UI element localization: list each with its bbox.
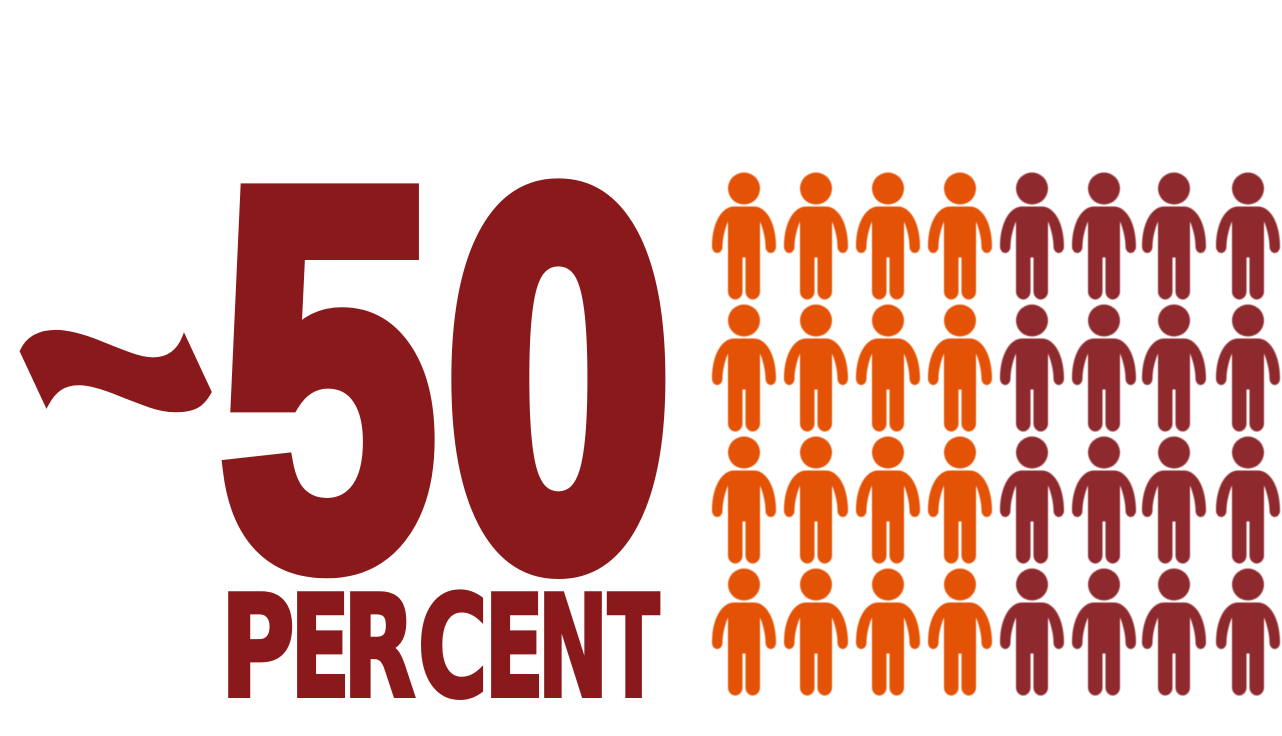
label: PERCENT: E <box>484 565 544 730</box>
label: PERCENT: T <box>608 566 660 730</box>
statistic: ~50 <box>0 80 673 678</box>
label: PERCENT: C <box>418 566 488 730</box>
digit 5: 5 <box>219 80 437 676</box>
label: PERCENT: P <box>220 566 295 730</box>
digit 0: 0 <box>444 98 673 678</box>
dark red people <box>1000 172 1280 696</box>
orange people <box>712 172 992 696</box>
pictogram: 32 people, half orange, half dark red <box>712 172 1280 696</box>
label: PERCENT <box>220 565 660 730</box>
label: PERCENT: N <box>538 566 608 730</box>
label: PERCENT: R <box>343 567 416 730</box>
label: PERCENT: E <box>290 565 350 730</box>
